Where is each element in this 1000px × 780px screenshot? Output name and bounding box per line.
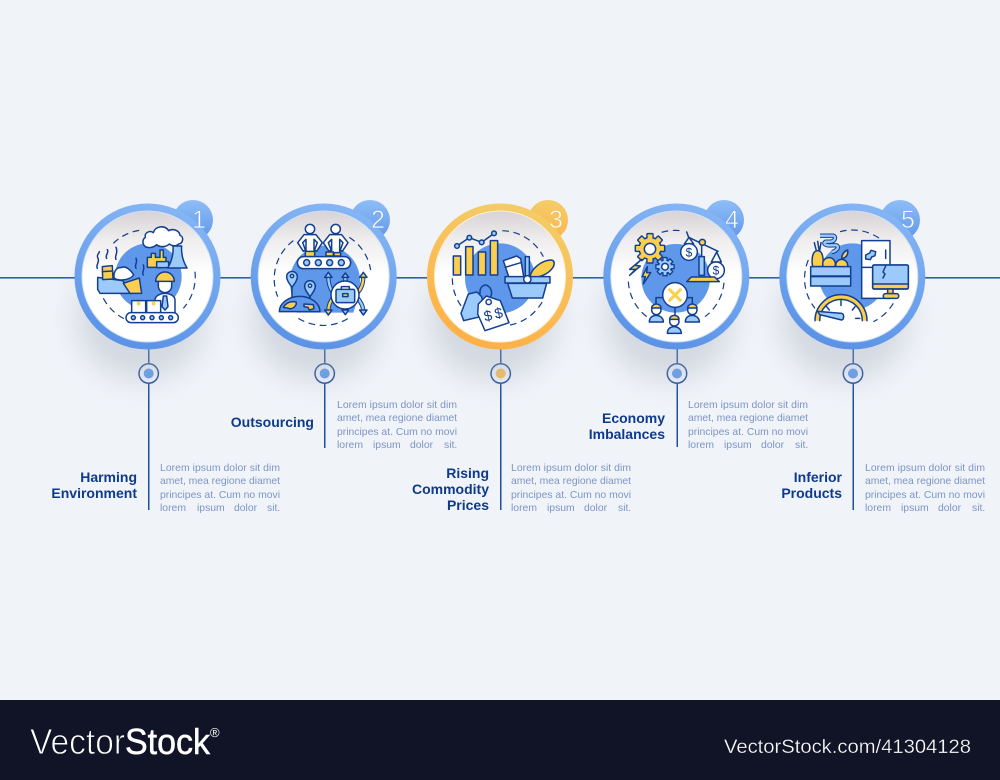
speed gauge	[815, 295, 867, 321]
body text 1: amet, mea regione diamet	[160, 476, 280, 487]
heading 5: Products	[781, 485, 842, 501]
stem and marker 2	[315, 345, 334, 448]
body text 3: principes at. Cum no movi	[511, 490, 631, 501]
body text 5: sit.	[972, 503, 985, 514]
body text 2: sit.	[444, 440, 457, 451]
body text 2: amet, mea regione diamet	[337, 413, 457, 424]
step 3: Rising Commodity Prices	[412, 200, 631, 514]
arrows around briefcase	[325, 272, 367, 315]
shadow 1	[77, 256, 205, 380]
icon: crate, fridge, monitor and gauge	[805, 230, 908, 322]
number badge 2	[251, 200, 397, 350]
body text 1: ipsum	[197, 503, 225, 514]
body text 4: lorem	[688, 440, 714, 451]
body text 3: dolor	[584, 503, 608, 514]
body text 2: Lorem ipsum dolor sit dim	[337, 400, 457, 411]
number badge 1: 1	[192, 206, 206, 234]
number badge 5: 5	[901, 206, 915, 234]
number badge 5	[779, 200, 925, 350]
number badge 4	[603, 200, 749, 350]
body text 3: lorem	[511, 503, 537, 514]
heading 4: Imbalances	[589, 426, 665, 442]
body text 2	[337, 400, 457, 451]
body text 3: sit.	[618, 503, 631, 514]
footer logo: Vector	[30, 721, 125, 762]
body text 5: ipsum	[901, 503, 929, 514]
footer bar	[0, 700, 1000, 780]
shadow 3	[429, 256, 557, 380]
shadow 2	[253, 256, 381, 380]
body text 5: lorem	[865, 503, 891, 514]
body text 4: principes at. Cum no movi	[688, 427, 808, 438]
stem and marker 4	[667, 345, 687, 447]
body text 1	[160, 463, 280, 514]
icon: gears, scales and people: $	[713, 264, 720, 278]
icon: gears, scales and people: $	[686, 245, 693, 259]
step 1: Harming Environment	[51, 200, 280, 514]
large gear	[635, 234, 665, 263]
footer image id: VectorStock.com/41304128	[724, 736, 971, 758]
connector line	[0, 277, 1000, 279]
number badge 3: 3	[549, 206, 563, 234]
body text 4: Lorem ipsum dolor sit dim	[688, 400, 808, 411]
shadow 5	[781, 256, 909, 380]
body text 5: Lorem ipsum dolor sit dim	[865, 463, 985, 474]
body text 1: sit.	[267, 503, 280, 514]
body text 3: ipsum	[547, 503, 575, 514]
body text 5	[865, 463, 985, 514]
footer logo: ®	[210, 725, 220, 740]
odour squiggle	[820, 236, 838, 252]
number badge 4: 4	[725, 206, 739, 234]
body text 1: principes at. Cum no movi	[160, 490, 280, 501]
body text 4	[688, 400, 808, 451]
body text 4: dolor	[761, 440, 785, 451]
body text 2: lorem	[337, 440, 363, 451]
stem and marker 3	[491, 345, 510, 510]
heading 1: Environment	[51, 485, 137, 501]
icon: gears, scales and people	[628, 230, 724, 333]
body text 1: Lorem ipsum dolor sit dim	[160, 463, 280, 474]
heading 5: Inferior	[794, 469, 843, 485]
body text 1: dolor	[234, 503, 258, 514]
icon: outsourcing workers and globe	[274, 224, 371, 325]
number badge 1	[74, 200, 220, 350]
step 5: Inferior Products	[779, 200, 985, 514]
stem and marker 1	[139, 345, 158, 510]
footer logo: Stock	[125, 721, 211, 762]
heading 2: Outsourcing	[231, 414, 314, 430]
body text 4: amet, mea regione diamet	[688, 413, 808, 424]
icon: prices chart, tags and basket: $	[483, 308, 494, 325]
body text 4: ipsum	[724, 440, 752, 451]
body text 3: amet, mea regione diamet	[511, 476, 631, 487]
small gear	[656, 258, 674, 276]
heading 3: Rising	[446, 465, 489, 481]
body text 1: lorem	[160, 503, 186, 514]
number badge 2: 2	[371, 206, 385, 234]
step 4: Economy Imbalances	[589, 200, 808, 451]
body text 5: dolor	[938, 503, 962, 514]
step 2: Outsourcing	[231, 200, 457, 451]
stem and marker 5	[843, 345, 863, 510]
body text 2: dolor	[410, 440, 434, 451]
heading 1: Harming	[80, 469, 137, 485]
heading 3: Prices	[447, 497, 489, 513]
heading 3: Commodity	[412, 481, 489, 497]
body text 5: principes at. Cum no movi	[865, 490, 985, 501]
icon: prices chart, tags and basket: $	[493, 305, 504, 323]
body text 5: amet, mea regione diamet	[865, 476, 985, 487]
body text 4: sit.	[795, 440, 808, 451]
body text 2: principes at. Cum no movi	[337, 427, 457, 438]
body text 3: Lorem ipsum dolor sit dim	[511, 463, 631, 474]
body text 3	[511, 463, 631, 514]
icon: factory and landfill	[97, 227, 195, 323]
footer logo	[30, 721, 220, 762]
shadow 4	[605, 256, 733, 380]
heading 4: Economy	[602, 410, 665, 426]
number badge 3	[427, 200, 573, 350]
body text 2: ipsum	[373, 440, 401, 451]
icon: prices chart, tags and basket	[452, 231, 554, 331]
